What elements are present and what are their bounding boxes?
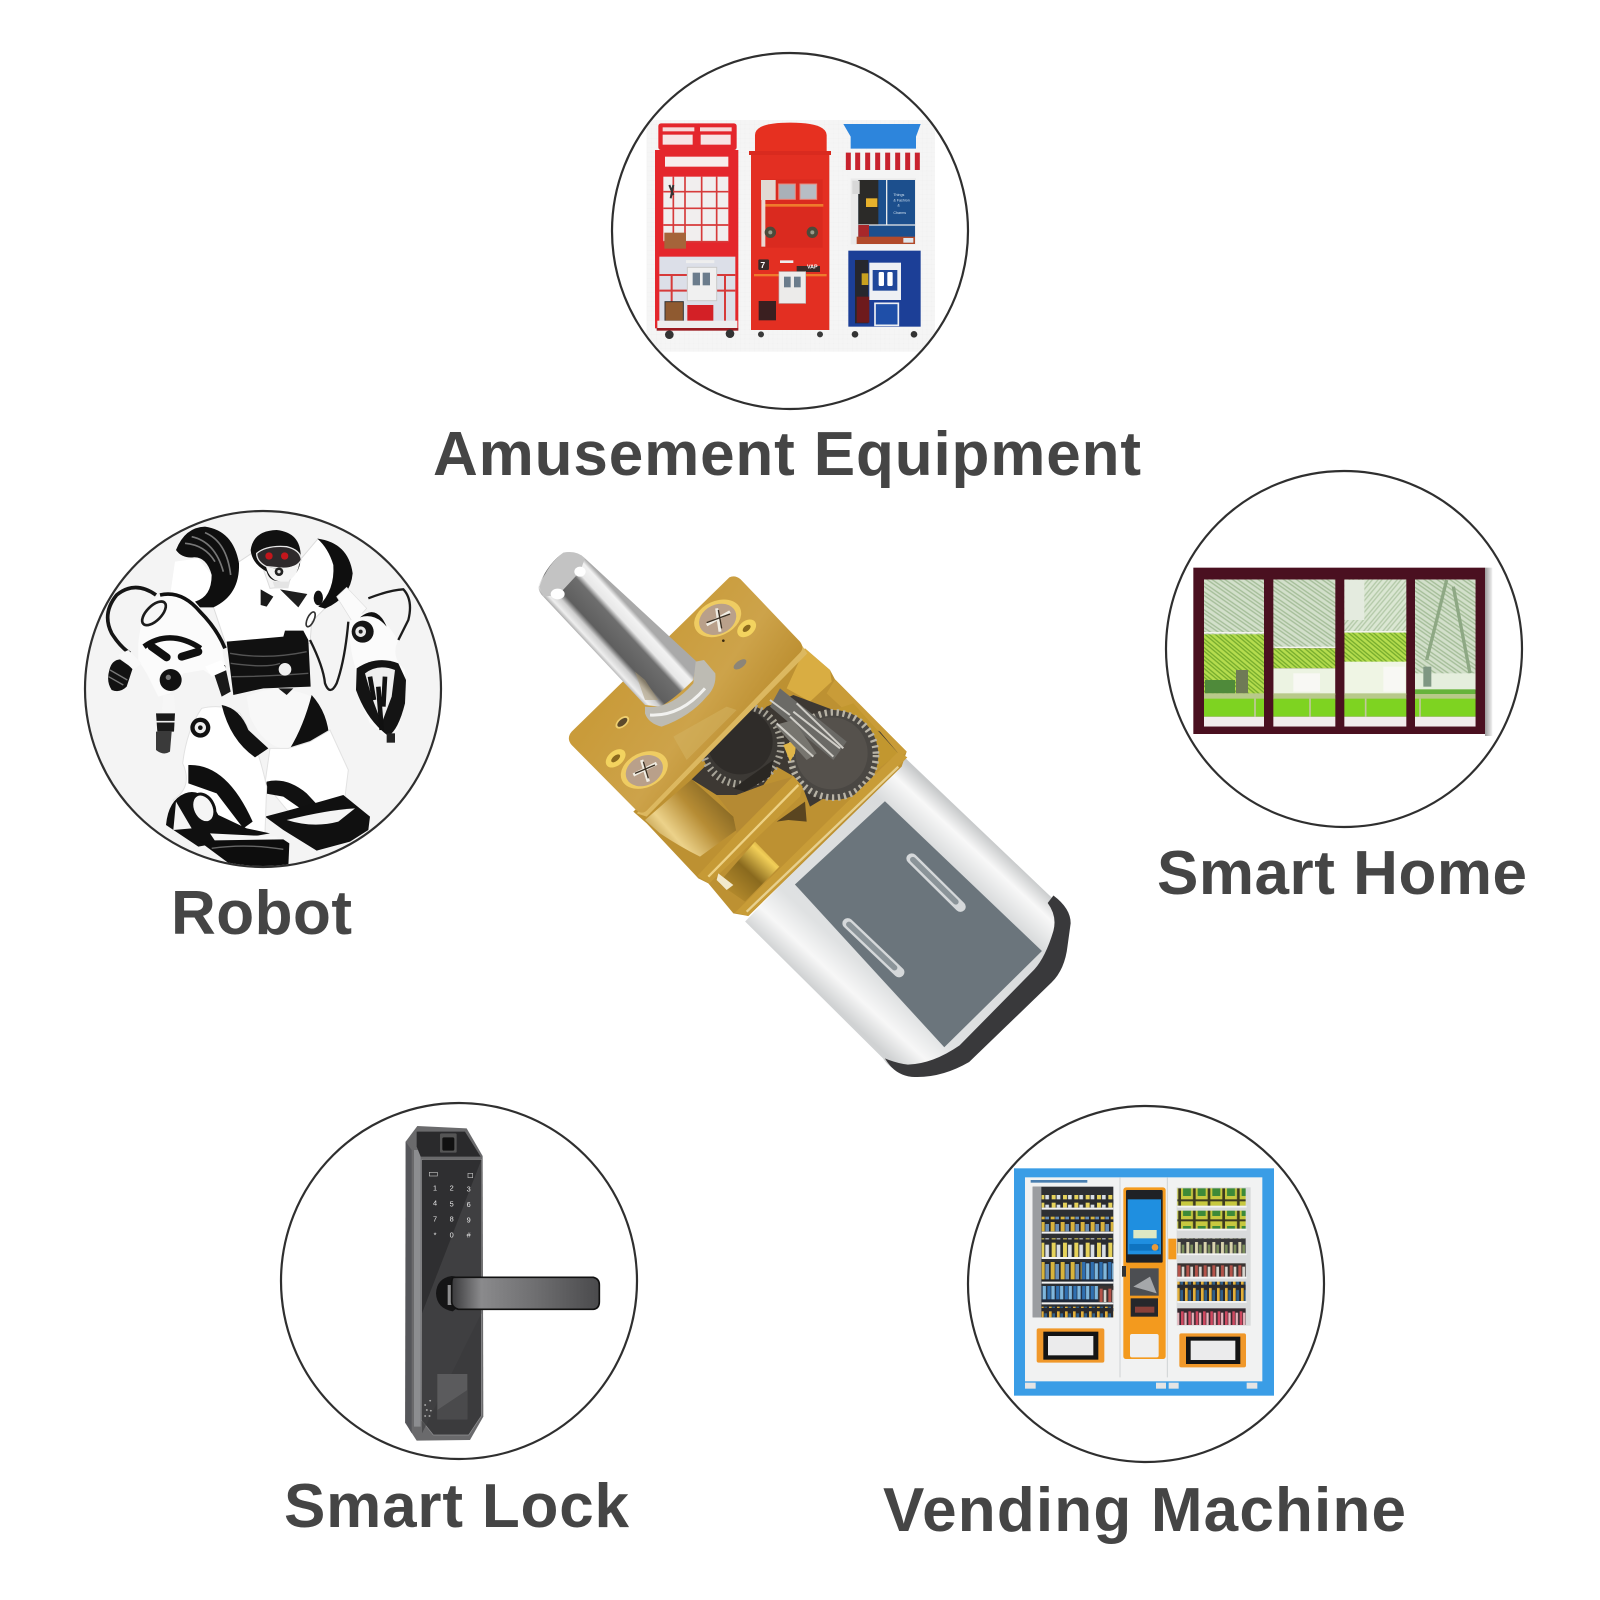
photo: sliding windows — [1193, 568, 1492, 736]
shaft collar — [645, 660, 715, 727]
left claw — [108, 659, 133, 691]
photo: vending machine — [1014, 1168, 1274, 1396]
vent slot one — [912, 859, 960, 907]
label: Amusement Equipment: Amusement Equipment — [433, 420, 1141, 489]
red telephone-booth cabinet: VAP — [807, 264, 818, 270]
back plate strip — [735, 752, 907, 916]
circle outline — [281, 1103, 637, 1459]
chest details — [261, 589, 273, 607]
photo: claw machines — [647, 120, 935, 352]
flat grey face — [795, 801, 1042, 1047]
keypad: * — [434, 1230, 437, 1239]
right orange payment panel — [1179, 1333, 1246, 1367]
lower motor mount cylinder — [718, 842, 779, 902]
keypad: 7 — [433, 1214, 437, 1223]
brass column — [645, 779, 737, 857]
shadow wedge — [777, 802, 807, 822]
glass panel — [421, 1159, 481, 1435]
backdrop floor — [647, 120, 935, 352]
red telephone-booth cabinet — [749, 123, 831, 337]
waist — [227, 631, 311, 695]
blue and white cabinet: Things — [893, 193, 904, 197]
keypad: 5 — [450, 1199, 454, 1208]
keypad: # — [467, 1230, 472, 1239]
circle outline — [85, 511, 441, 867]
keypad: 2 — [450, 1184, 454, 1193]
keypad: 0 — [450, 1230, 454, 1239]
robot head — [251, 530, 301, 581]
plate holes — [602, 616, 760, 771]
label: Smart Home: Smart Home — [1157, 839, 1527, 908]
blue and white cabinet: & Fashion — [893, 198, 910, 202]
feet — [1025, 1383, 1036, 1389]
circle outline — [612, 53, 968, 409]
panel: smart home — [1157, 471, 1527, 908]
blue and white cabinet — [843, 124, 921, 338]
panel: vending machine — [883, 1106, 1406, 1545]
right forearm — [351, 614, 362, 624]
left leg — [173, 707, 267, 843]
right shelves — [1177, 1187, 1251, 1326]
blue backdrop — [1014, 1168, 1274, 1396]
pelvis — [247, 689, 329, 749]
handle — [436, 1276, 457, 1311]
keypad: 6 — [467, 1200, 471, 1209]
right leg — [266, 730, 349, 810]
keypad: 8 — [450, 1215, 454, 1224]
front plate and shaft — [539, 552, 807, 817]
upper left arm — [170, 558, 213, 608]
blue and white cabinet: Charms — [893, 211, 906, 215]
lower output gear — [701, 704, 782, 786]
label: Robot: Robot — [171, 879, 352, 948]
white cabinet — [1025, 1177, 1262, 1381]
brass gap — [783, 740, 797, 762]
keypad — [429, 1172, 473, 1239]
forearm arch — [144, 638, 201, 648]
upper idler gear — [788, 710, 878, 800]
window panes — [1200, 577, 1480, 727]
window frame — [1193, 568, 1485, 734]
motor can — [745, 757, 1071, 1077]
panel: smart lock — [281, 1103, 637, 1541]
lower bracket fill — [717, 777, 793, 833]
bracket strip — [697, 776, 803, 883]
label: Smart Lock: Smart Lock — [284, 1472, 630, 1541]
photo: white and black robot — [85, 511, 441, 867]
right shoulder pad — [317, 539, 353, 609]
vent slot two — [848, 923, 899, 972]
shaft tip face — [539, 552, 585, 597]
panel: robot — [85, 511, 441, 948]
lock top cap — [417, 1132, 481, 1157]
left orange payment panel — [1037, 1328, 1104, 1363]
central gear motor — [539, 552, 1071, 1077]
top screw — [688, 592, 747, 644]
plate edge — [637, 645, 807, 817]
brass housing — [633, 648, 907, 916]
circle outline — [1166, 471, 1522, 827]
top brass pillars — [787, 648, 832, 702]
gear cavity — [692, 695, 898, 807]
right upper arm — [337, 587, 367, 623]
warm reflection near base — [635, 672, 658, 700]
center touch screen — [1122, 1187, 1176, 1359]
red cabinet with grid — [655, 123, 738, 339]
gearbox — [633, 648, 907, 916]
lock body — [405, 1126, 483, 1441]
bottom screw — [615, 744, 674, 796]
keypad: 4 — [433, 1199, 437, 1208]
photo: fingerprint door lock — [405, 1126, 599, 1441]
label: Vending Machine: Vending Machine — [883, 1476, 1406, 1545]
output shaft — [539, 552, 697, 707]
keypad: 3 — [467, 1184, 471, 1193]
left forearm — [138, 595, 227, 697]
lower left hand — [162, 695, 175, 713]
brass front plate — [569, 576, 802, 813]
keypad: 9 — [467, 1215, 471, 1224]
window shadow — [1485, 568, 1492, 736]
torso — [213, 538, 337, 647]
panel: amusement equipment — [433, 53, 1141, 489]
left shelves — [1033, 1187, 1113, 1317]
palm reader — [437, 1374, 467, 1419]
fingerprint sensor — [440, 1133, 457, 1153]
red telephone-booth cabinet: 7 — [760, 260, 765, 270]
circle outline — [968, 1106, 1324, 1462]
blue and white cabinet: & — [897, 204, 900, 208]
black end cap — [885, 896, 1071, 1077]
pinion shaft — [770, 688, 847, 760]
speaker holes — [425, 1401, 431, 1416]
keypad: 1 — [433, 1184, 437, 1193]
left shoulder pad — [176, 527, 239, 607]
left cable — [108, 587, 156, 653]
